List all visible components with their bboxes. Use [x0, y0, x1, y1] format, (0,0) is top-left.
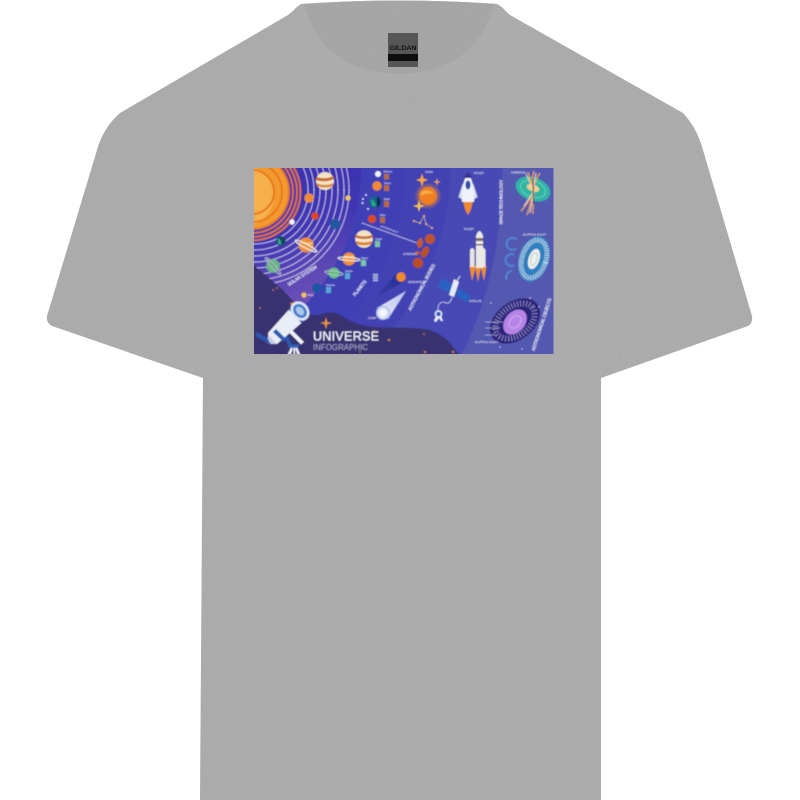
background band: planets	[380, 200, 381, 204]
pluto: Pluto	[308, 294, 314, 297]
tether	[438, 297, 452, 312]
planet: earth	[276, 236, 286, 246]
dark foreground space	[254, 265, 460, 354]
background band: astronomical objects	[461, 168, 554, 354]
asteroid 3	[419, 245, 431, 259]
jet core	[532, 178, 534, 204]
arc gauges	[506, 238, 516, 280]
core ring	[529, 252, 539, 266]
elliptical galaxy	[475, 289, 549, 353]
asteroid 4	[415, 251, 420, 255]
label: ELLIPTICAL GALAXY	[475, 341, 499, 344]
label: solar system: SOLAR SYSTEM	[287, 264, 318, 287]
rays	[517, 237, 551, 281]
jupiter: Jupiter	[375, 238, 382, 241]
head core	[380, 310, 386, 316]
outer disc	[512, 232, 556, 286]
label: planets: PLANETS	[352, 279, 368, 297]
boosters	[470, 248, 486, 267]
core	[498, 305, 532, 339]
neck inner	[304, 1, 494, 74]
asteroid 2	[416, 238, 424, 248]
antenna	[457, 276, 460, 281]
background band: solar system	[250, 164, 361, 305]
core rings	[507, 313, 523, 331]
window	[466, 180, 470, 190]
nose	[464, 172, 472, 178]
core	[526, 247, 542, 271]
pointer lines	[485, 322, 503, 335]
meteorite	[375, 272, 422, 298]
body	[476, 231, 483, 268]
comet	[368, 291, 406, 320]
label: ROCKET	[464, 228, 475, 231]
planet: venus	[304, 193, 314, 203]
tail	[377, 291, 406, 319]
asteroid belt dashed line	[362, 223, 417, 243]
label: astronomical objects: ASTRONOMICAL OBJECTS	[531, 298, 552, 351]
left panel	[437, 278, 453, 293]
icon: small star	[433, 178, 441, 186]
uranus: Uranus	[345, 270, 354, 273]
mercury: Mercury	[384, 170, 393, 174]
outer dots	[489, 296, 541, 346]
background band: astronomical bodies	[399, 238, 418, 288]
tail	[375, 273, 405, 298]
asteroid 5	[413, 258, 423, 268]
title: infographic: INFOGRAPHIC	[313, 342, 368, 352]
title: universe: UNIVERSE	[313, 330, 379, 344]
background band: space technology	[394, 168, 502, 354]
icon: orange star burst	[320, 317, 332, 330]
right panel	[457, 288, 471, 302]
gauge 1	[507, 238, 516, 250]
rocket one	[458, 172, 485, 215]
satellite	[437, 276, 482, 303]
label: astronomical bodies: ASTRONOMICAL BODIES	[407, 263, 436, 311]
supernova	[511, 171, 554, 215]
planet: pluto	[345, 195, 351, 201]
venus: Venus	[384, 182, 391, 185]
label: COMET	[368, 317, 377, 320]
label: ELLIPTICAL GALAXY	[523, 234, 547, 236]
planet list	[301, 170, 393, 298]
head	[396, 272, 406, 282]
label: asteroids: ASTEROIDS	[403, 253, 417, 256]
flame	[464, 202, 472, 215]
asteroid 1	[425, 234, 435, 244]
icon: telescope	[254, 300, 310, 354]
disc	[512, 172, 554, 206]
body	[434, 316, 443, 322]
planet: neptune	[330, 219, 340, 229]
title	[313, 330, 379, 352]
stripes	[476, 238, 483, 246]
head	[376, 306, 390, 320]
collar	[291, 0, 508, 95]
visor	[436, 312, 441, 316]
tube	[268, 298, 313, 344]
mount	[255, 329, 304, 346]
gauge 3	[506, 271, 512, 280]
rocket two	[464, 228, 486, 282]
label: space technology: SPACE TECHNOLOGY	[498, 180, 504, 224]
mars: Mars	[380, 214, 386, 217]
scattered stars	[490, 297, 543, 350]
stars cluster	[413, 171, 441, 229]
label: stars: STARS	[425, 171, 433, 174]
flames	[470, 266, 486, 282]
body	[449, 279, 459, 297]
universe infographic print	[254, 168, 554, 354]
icon: planets grid	[373, 274, 378, 281]
body	[462, 173, 474, 202]
asteroid belt dashed line: ASTEROID BELT	[380, 225, 399, 234]
asteroids	[403, 234, 435, 268]
saturn: Saturn	[361, 257, 369, 260]
disc inner	[526, 182, 540, 194]
solar system orbits	[254, 168, 350, 284]
planet: uranus	[264, 256, 282, 276]
label: SATELLITE	[469, 300, 482, 303]
label: ROCKET	[474, 172, 485, 175]
icon: constellation	[413, 215, 433, 229]
helmet	[435, 310, 442, 318]
jet highlights	[524, 173, 536, 213]
solar system planets	[264, 172, 351, 276]
planet: mercury	[289, 219, 295, 225]
spiral galaxy	[512, 232, 556, 286]
disc rings	[518, 177, 548, 201]
decorative stars	[259, 287, 454, 353]
icon: sun	[254, 168, 302, 242]
earth: Earth	[384, 198, 390, 201]
neck label	[388, 33, 418, 67]
neck label: GILDAN	[390, 45, 417, 52]
astronaut	[434, 297, 452, 322]
jets	[521, 171, 540, 215]
gauge 2	[506, 254, 514, 266]
label: SUPERNOVA	[511, 172, 526, 174]
planet: saturn	[294, 238, 318, 253]
icon: sun star	[415, 183, 441, 209]
neptune: Neptune	[326, 284, 336, 287]
icon: yellow star	[413, 200, 425, 212]
planet: jupiter	[316, 172, 334, 190]
fins	[458, 183, 478, 200]
label: METEORITE	[408, 281, 422, 284]
tripod	[287, 344, 301, 354]
planet: mars	[311, 212, 319, 220]
section labels	[287, 180, 552, 351]
outer disc	[481, 289, 549, 353]
icon: big star	[416, 174, 428, 187]
